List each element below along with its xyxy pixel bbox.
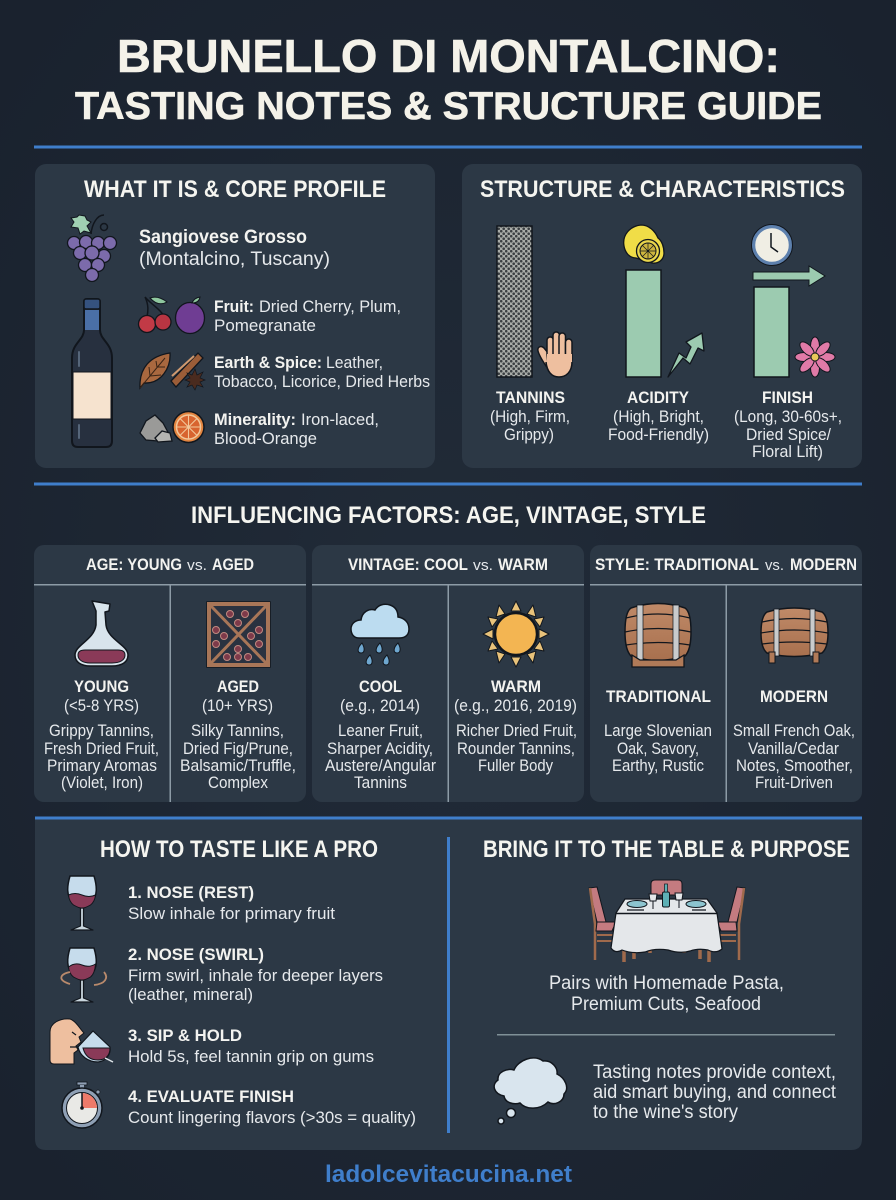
bar: finish: [754, 287, 789, 377]
icon: stones and blood orange: [140, 412, 204, 442]
text: minerality: Iron-laced,: [301, 410, 379, 429]
column: aged: Complex: [208, 773, 268, 792]
step 3: [128, 1026, 374, 1066]
header: vintage: [348, 555, 548, 574]
column: aged: Dried Fig/Prune,: [183, 739, 293, 758]
step 4: 4. EVALUATE FINISH: [128, 1087, 294, 1106]
step 1: Slow inhale for primary fruit: [128, 904, 335, 923]
text: minerality: Blood-Orange: [214, 429, 317, 448]
title: TASTING NOTES & STRUCTURE GUIDE: [75, 85, 822, 128]
column: aged: [180, 677, 296, 792]
icon: small barrel: [761, 608, 828, 663]
panel: what it is and core profile: [35, 164, 435, 468]
text: earth and spice: [214, 353, 430, 391]
header: style: [595, 555, 857, 574]
footer: website: ladolcevitacucina.net: [325, 1161, 572, 1188]
column: warm: (e.g., 2016, 2019): [454, 696, 577, 715]
step 2: (leather, mineral): [128, 985, 253, 1004]
column: cool: Sharper Acidity,: [327, 739, 433, 758]
bar: acidity: [626, 270, 661, 377]
column: cool: Leaner Fruit,: [338, 721, 423, 740]
icon: swirling wine glass: [61, 948, 106, 1002]
text: fruit: [214, 297, 401, 335]
column: young: (<5-8 YRS): [64, 696, 139, 715]
column: young: YOUNG: [74, 677, 129, 696]
icon: flower: [795, 337, 835, 377]
column: traditional: TRADITIONAL: [606, 687, 711, 706]
column: modern: Fruit-Driven: [755, 773, 833, 792]
icon: cherries and plum: [138, 297, 204, 334]
column: modern: MODERN: [760, 687, 828, 706]
column: aged: (10+ YRS): [202, 696, 273, 715]
column: warm: Richer Dried Fruit,: [456, 721, 577, 740]
column: traditional: Large Slovenian: [604, 721, 712, 740]
icon: leaf and cinnamon with star anise: [140, 353, 205, 390]
panel: tasting and table: [35, 816, 862, 1150]
step 2: [128, 945, 383, 1004]
header: style: STYLE: TRADITIONAL: [595, 555, 759, 574]
header: style: vs.: [765, 558, 784, 574]
column: traditional: [604, 687, 712, 775]
column: warm: [454, 677, 577, 775]
icon: thought cloud: [494, 1058, 567, 1124]
text: purpose: to the wine's story: [593, 1102, 738, 1123]
column: warm: Fuller Body: [478, 756, 553, 775]
header: age: [86, 555, 254, 574]
label: acidity: ACIDITY: [627, 388, 690, 407]
heading: how to taste: HOW TO TASTE LIKE A PRO: [100, 836, 378, 863]
panel: structure and characteristics: [462, 164, 862, 468]
panel: age young vs aged: [34, 545, 306, 802]
icon: large barrel on stand: [625, 604, 691, 667]
text: purpose: Tasting notes provide context,: [593, 1062, 836, 1083]
text: minerality: [214, 410, 379, 448]
step 1: 1. NOSE (REST): [128, 883, 254, 902]
icon: face sipping from glass: [50, 1019, 113, 1064]
label: tannins: (High, Firm,: [490, 407, 570, 426]
column: modern: Small French Oak,: [733, 721, 855, 740]
column: aged: Silky Tannins,: [191, 721, 284, 740]
column: young: Primary Aromas: [47, 756, 157, 775]
label: tannins: TANNINS: [496, 388, 565, 407]
label: finish: Dried Spice/: [746, 425, 831, 444]
text: pairing: Premium Cuts, Seafood: [571, 994, 761, 1015]
arrow: long finish: [753, 266, 825, 286]
text: pairing: [549, 973, 784, 1015]
header: vintage: VINTAGE: COOL: [348, 555, 468, 574]
step 1: [128, 883, 335, 923]
column: young: Grippy Tannins,: [49, 721, 154, 740]
heading: structure: STRUCTURE & CHARACTERISTICS: [480, 176, 845, 203]
label: finish: Floral Lift): [752, 442, 823, 461]
label: finish: FINISH: [762, 388, 813, 407]
column: young: Fresh Dried Fruit,: [44, 739, 159, 758]
text: minerality: Minerality:: [214, 410, 296, 429]
column: traditional: Oak, Savory,: [617, 739, 699, 758]
column: warm: WARM: [491, 677, 541, 696]
heading: core profile: WHAT IT IS & CORE PROFILE: [84, 176, 386, 203]
column: cool: [325, 677, 436, 792]
header: age: vs.: [187, 558, 207, 574]
icon: wine crate: [207, 602, 270, 667]
text: fruit: Dried Cherry, Plum,: [259, 297, 401, 316]
text: purpose: [593, 1062, 837, 1123]
label: finish: [734, 388, 842, 461]
icon: dining table: [589, 880, 745, 962]
column: young: (Violet, Iron): [61, 773, 143, 792]
icon: sun: [483, 601, 549, 667]
panel: vintage cool vs warm: [312, 545, 584, 802]
label: acidity: Food-Friendly): [608, 425, 709, 444]
icon: hand: [538, 332, 572, 377]
label: finish: (Long, 30-60s+,: [734, 407, 842, 426]
text: fruit: Pomegranate: [214, 316, 316, 335]
text: earth and spice: Tobacco, Licorice, Dried Herbs: [214, 372, 430, 391]
icon: stopwatch: [62, 1082, 102, 1128]
grape variety text: Sangiovese Grosso: [139, 227, 307, 248]
label: tannins: [490, 388, 570, 444]
grape variety text: [139, 227, 330, 270]
column: warm: Rounder Tannins,: [457, 739, 575, 758]
header: vintage: vs.: [473, 558, 493, 574]
column: cool: Austere/Angular: [325, 756, 436, 775]
icon: zigzag arrow up: [668, 333, 704, 377]
icon: wine glass: [68, 876, 96, 930]
title: BRUNELLO DI MONTALCINO:: [117, 30, 780, 82]
icon: wine bottle: [72, 299, 112, 447]
column: aged: Balsamic/Truffle,: [180, 756, 296, 775]
text: purpose: aid smart buying, and connect: [593, 1082, 837, 1103]
icon: clock: [752, 224, 792, 266]
header: style: MODERN: [790, 555, 857, 574]
step 2: Firm swirl, inhale for deeper layers: [128, 966, 383, 985]
step 4: [128, 1087, 416, 1127]
label: acidity: (High, Bright,: [613, 407, 704, 426]
panel: style traditional vs modern: [590, 545, 862, 802]
column: cool: COOL: [359, 677, 402, 696]
header: age: AGE: YOUNG: [86, 555, 182, 574]
column: aged: AGED: [217, 677, 259, 696]
step 2: 2. NOSE (SWIRL): [128, 945, 264, 964]
column: young: [44, 677, 159, 792]
step 3: Hold 5s, feel tannin grip on gums: [128, 1047, 374, 1066]
text: fruit: Fruit:: [214, 297, 254, 316]
column: cool: Tannins: [354, 773, 407, 792]
heading: influencing factors: INFLUENCING FACTORS: AGE, VINTAGE, STYLE: [191, 502, 706, 529]
bar: tannins: [497, 226, 532, 377]
icon: decanter: [75, 601, 128, 666]
text: earth and spice: Earth & Spice:: [214, 353, 322, 372]
icon: rain cloud: [351, 604, 409, 665]
column: traditional: Earthy, Rustic: [612, 756, 704, 775]
icon: grapes: [68, 215, 116, 282]
step 3: 3. SIP & HOLD: [128, 1026, 242, 1045]
header: age: AGED: [212, 555, 254, 574]
grape variety text: (Montalcino, Tuscany): [139, 249, 330, 270]
column: modern: Notes, Smoother,: [736, 756, 853, 775]
title: [75, 30, 822, 128]
column: modern: Vanilla/Cedar: [748, 739, 839, 758]
header: vintage: WARM: [498, 555, 548, 574]
column: modern: [733, 687, 855, 792]
step 4: Count lingering flavors (>30s = quality): [128, 1108, 416, 1127]
icon: lemon: [624, 225, 664, 263]
label: tannins: Grippy): [504, 425, 554, 444]
text: earth and spice: Leather,: [326, 353, 383, 372]
text: pairing: Pairs with Homemade Pasta,: [549, 973, 784, 994]
label: acidity: [608, 388, 709, 444]
column: cool: (e.g., 2014): [340, 696, 420, 715]
